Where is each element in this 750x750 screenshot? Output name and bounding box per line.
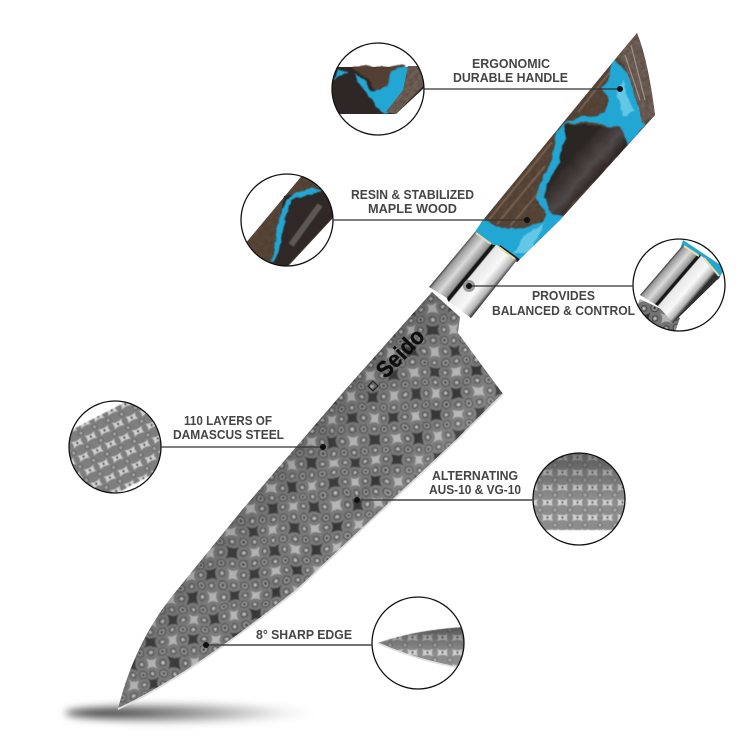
label: ALTERNATING [432,469,518,483]
callout: ergonomic durable handle [330,43,623,135]
blade logo [359,323,429,395]
label: ERGONOMIC [472,57,550,71]
label: PROVIDES [532,289,595,303]
label: RESIN & STABILIZED [351,188,474,202]
black ring [499,245,520,262]
magnifier: steel layers [530,450,630,545]
label: 8° SHARP EDGE [256,628,352,642]
magnifier: tip [372,597,466,689]
leader line [354,497,533,503]
label [351,188,474,216]
magnifier: steel [68,400,162,494]
blade logo: Seido [371,323,429,383]
callout: sharp edge [203,597,466,689]
handle resin and dark wood [470,58,646,262]
label: AUS-10 & VG-10 [429,483,521,497]
label [173,414,284,442]
label: DURABLE HANDLE [453,71,568,85]
leader line [463,280,633,292]
magnifier: bolster [630,239,725,340]
blade [118,292,504,710]
label: BALANCED & CONTROL [492,304,635,318]
dark wood panel [544,124,634,222]
callout: resin and stabilized maple wood [240,172,530,275]
label [492,289,635,318]
resin streak [470,122,570,262]
leader line [161,444,326,450]
handle [475,33,655,262]
leader line [424,86,623,92]
label [429,469,521,497]
wood grain [487,72,610,226]
ground shadow [65,704,325,722]
magnifier: wood [240,173,334,267]
callout: alternating steels [354,450,630,545]
leader line [203,642,372,648]
knife [100,20,670,720]
callout: damascus steel [60,397,326,497]
bolster [429,232,517,318]
callout: balanced and control [463,239,725,340]
leader line [333,217,530,223]
grey wood butt [617,33,655,123]
label: DAMASCUS STEEL [173,428,284,442]
label [453,57,568,85]
butt highlights [625,45,645,100]
magnifier: handle [330,43,424,135]
upper resin [566,58,646,145]
handle base wood [475,33,655,262]
label: 110 LAYERS OF [184,414,272,428]
resin highlights [512,82,634,254]
label: MAPLE WOOD [368,202,457,216]
